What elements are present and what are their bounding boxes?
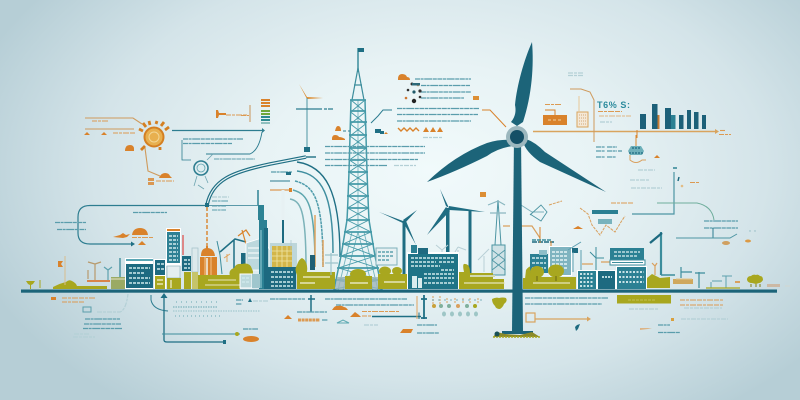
orange dome building bbox=[200, 246, 217, 289]
orange leaf and tag bbox=[235, 329, 259, 342]
panel: city left bbox=[26, 190, 297, 289]
building: central teal bbox=[407, 245, 459, 289]
labels around loop bbox=[55, 197, 229, 230]
right pole turbine bbox=[650, 232, 675, 275]
stacked stripes bbox=[261, 99, 270, 124]
tall right block bbox=[549, 242, 581, 276]
building: small tiled bbox=[154, 259, 166, 289]
building: narrow pair bbox=[182, 235, 198, 289]
text block bbox=[73, 319, 122, 337]
green box bbox=[240, 274, 260, 288]
orange clouds and truck bbox=[332, 126, 388, 140]
blade: right bbox=[523, 139, 606, 192]
orange right link bbox=[503, 205, 544, 238]
olive box bbox=[617, 295, 671, 304]
panel: tall lattice tower bbox=[334, 48, 382, 290]
panel: top right chart bbox=[533, 73, 731, 142]
olive ground right with trees bbox=[530, 264, 576, 289]
icon: cloud and dots cluster bbox=[398, 74, 422, 103]
panel: pipe network left bbox=[55, 157, 316, 253]
panel board bbox=[376, 248, 397, 265]
text under labels bbox=[417, 325, 439, 333]
tower spire and flag bbox=[352, 48, 364, 100]
blade: top bbox=[511, 42, 533, 126]
bar chart bbox=[640, 104, 706, 129]
building: tall tower bbox=[166, 228, 181, 289]
tree cluster right bbox=[747, 275, 763, 287]
teal elbow connector bbox=[632, 167, 714, 220]
panel: mid right diagrams bbox=[530, 135, 756, 245]
icon: wrench gauge bbox=[216, 105, 250, 122]
panel: city right bbox=[459, 232, 790, 289]
olive ground left of lattice bbox=[297, 272, 335, 289]
tall industrial stack bbox=[258, 190, 268, 289]
orange mounds bbox=[284, 306, 413, 333]
text rows right of tower bbox=[525, 298, 608, 304]
ground line bbox=[21, 290, 777, 293]
orange mini icon row bbox=[398, 127, 443, 138]
chart axis arrow bbox=[533, 129, 731, 138]
text rows across tower bbox=[325, 146, 425, 166]
building: yellow grid block bbox=[268, 190, 297, 289]
trees and ground far left bbox=[26, 256, 107, 289]
loop pipe with arrow bbox=[78, 206, 258, 246]
text rows bbox=[325, 299, 421, 325]
tiny gauges bbox=[432, 296, 482, 316]
pipes stems bbox=[325, 253, 338, 275]
small ovals right bbox=[722, 230, 756, 245]
panel: below ground centre bbox=[270, 295, 507, 333]
olive ground behind turbine bbox=[459, 264, 535, 289]
cross markers bbox=[270, 295, 327, 312]
icon: orange clouds bbox=[125, 145, 174, 185]
tag with tiny vane bbox=[530, 201, 562, 243]
base bbox=[493, 331, 540, 337]
tree and block by towers bbox=[296, 255, 315, 276]
orange text right bbox=[629, 300, 724, 309]
orange device bbox=[543, 104, 567, 125]
arc pipe bbox=[205, 157, 316, 207]
arrow riser and bus bbox=[160, 293, 240, 344]
short connectors bbox=[270, 172, 292, 192]
blade: left bbox=[427, 140, 513, 182]
orange tag and bracket bbox=[371, 96, 506, 127]
dome tank bbox=[111, 258, 125, 289]
billboard bbox=[610, 248, 645, 265]
icon: teal ring bbox=[194, 154, 213, 189]
tan arrow bracket bbox=[526, 313, 591, 322]
dashed text row bbox=[173, 302, 260, 316]
icon: teal plant bbox=[628, 135, 660, 162]
mini icons bbox=[236, 298, 268, 304]
small block buildings bbox=[577, 266, 647, 289]
lattice pylon with box bbox=[480, 192, 506, 275]
olive bushes and tan bbox=[647, 274, 693, 288]
right text pair bbox=[676, 221, 738, 238]
pale turbines right bbox=[582, 247, 610, 270]
hub bbox=[506, 126, 528, 148]
small left turbines bbox=[87, 262, 112, 282]
small teal plant with trees bbox=[530, 241, 554, 273]
left buildings behind bbox=[241, 238, 270, 270]
upper teal line with text bbox=[172, 128, 265, 160]
arrow marker bbox=[417, 295, 427, 319]
tree bbox=[230, 264, 253, 280]
stat sublabels bbox=[598, 112, 631, 122]
olive bush bbox=[492, 298, 507, 309]
panel: below ground left bbox=[51, 293, 268, 344]
tan grid box bbox=[577, 112, 588, 127]
small turbines with tower bbox=[217, 230, 250, 274]
olive ground centre bbox=[345, 266, 408, 289]
stat heading: T6% S: bbox=[597, 100, 631, 110]
panel: city centre bbox=[296, 245, 459, 289]
small pylons bbox=[681, 267, 740, 288]
text mini table bbox=[596, 147, 622, 157]
panel: central text blocks bbox=[325, 74, 506, 166]
panel: large wind turbine bbox=[427, 42, 606, 337]
icon: sun bbox=[139, 121, 169, 150]
tower bbox=[512, 137, 523, 332]
turbine two bbox=[427, 189, 485, 278]
orange and teal label rows bbox=[51, 294, 128, 312]
icon: small vane bbox=[296, 84, 333, 152]
icons: orange hills bbox=[113, 228, 153, 245]
arc lines bbox=[290, 162, 340, 267]
small marks bbox=[575, 318, 728, 332]
panel: below ground right bbox=[525, 295, 728, 332]
turbine one bbox=[379, 210, 417, 279]
orange pipe diagram bbox=[573, 203, 633, 235]
olive ground mid-left bbox=[198, 275, 240, 289]
tower base rocks bbox=[335, 277, 382, 289]
upper right text rows bbox=[397, 79, 479, 121]
orange arrow over chart bbox=[570, 89, 594, 142]
panel: nested arcs bbox=[270, 84, 340, 267]
panel: middle turbines bbox=[379, 189, 544, 280]
orange dashed riser bbox=[206, 207, 208, 253]
small pale turbines bbox=[436, 245, 489, 280]
orange label bbox=[298, 318, 328, 322]
tower lattice bbox=[334, 100, 382, 290]
faint heading bbox=[568, 73, 584, 76]
callout lines left of sun bbox=[84, 118, 142, 135]
building: low teal block bbox=[125, 258, 153, 289]
tan far right label bbox=[767, 284, 790, 287]
faint text bbox=[630, 170, 662, 188]
curved connector bbox=[151, 295, 168, 311]
panel: sun and left upper callouts bbox=[84, 99, 270, 189]
